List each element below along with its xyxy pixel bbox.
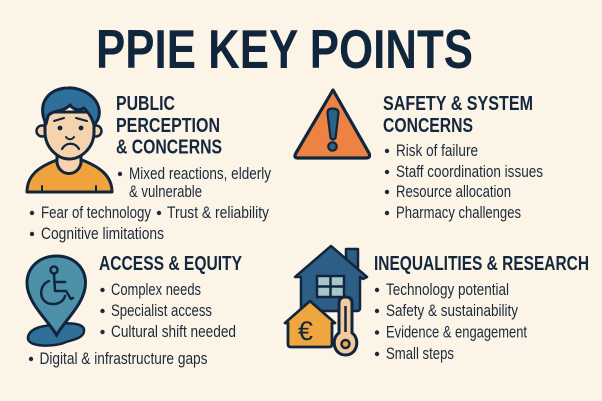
list: access and equity	[29, 280, 236, 368]
list: public perception and concerns: Mixed reactions, elderly	[129, 164, 271, 183]
list: safety and system concerns: Resource allocation	[396, 182, 511, 201]
list: access and equity: Digital & infrastructure gaps	[40, 349, 208, 368]
heading: access and equity: ACCESS & EQUITY	[99, 252, 242, 275]
heading: public perception and concerns: & CONCERNS	[116, 136, 222, 158]
icon: accessibility map pin	[27, 256, 86, 346]
list: inequalities and research: Technology potential	[386, 280, 509, 299]
list: public perception and concerns: & vulnerable	[129, 182, 202, 201]
list: public perception and concerns	[30, 164, 271, 243]
list: inequalities and research: Safety & sustainability	[386, 301, 518, 320]
icon: houses and thermometer	[285, 246, 367, 355]
list: access and equity: Cultural shift needed	[111, 322, 236, 341]
list: inequalities and research	[375, 280, 527, 363]
list: safety and system concerns	[385, 141, 543, 222]
title: PPIE KEY POINTS	[96, 18, 473, 80]
list: public perception and concerns: Cognitive limitations	[41, 224, 164, 243]
heading: safety and system concerns: SAFETY & SYSTEM	[383, 92, 533, 115]
list: safety and system concerns: Staff coordination issues	[396, 162, 543, 181]
icon: worried person	[27, 88, 112, 192]
heading: public perception and concerns: PUBLIC	[116, 92, 175, 115]
icon: warning triangle	[295, 90, 370, 158]
list: public perception and concerns: Fear of technology	[41, 203, 151, 222]
heading: safety and system concerns	[383, 92, 533, 137]
icon: houses and thermometer: €	[298, 316, 313, 346]
list: access and equity: Complex needs	[111, 280, 201, 299]
list: public perception and concerns: Trust & reliability	[167, 203, 269, 222]
heading: public perception and concerns: PERCEPTION	[116, 114, 220, 137]
list: inequalities and research: Evidence & engagement	[386, 322, 527, 342]
list: safety and system concerns: Pharmacy challenges	[396, 203, 521, 222]
list: inequalities and research: Small steps	[386, 344, 454, 363]
heading: safety and system concerns: CONCERNS	[383, 114, 473, 137]
list: safety and system concerns: Risk of failure	[396, 141, 478, 160]
list: access and equity: Specialist access	[111, 301, 212, 320]
heading: public perception and concerns	[116, 92, 222, 158]
